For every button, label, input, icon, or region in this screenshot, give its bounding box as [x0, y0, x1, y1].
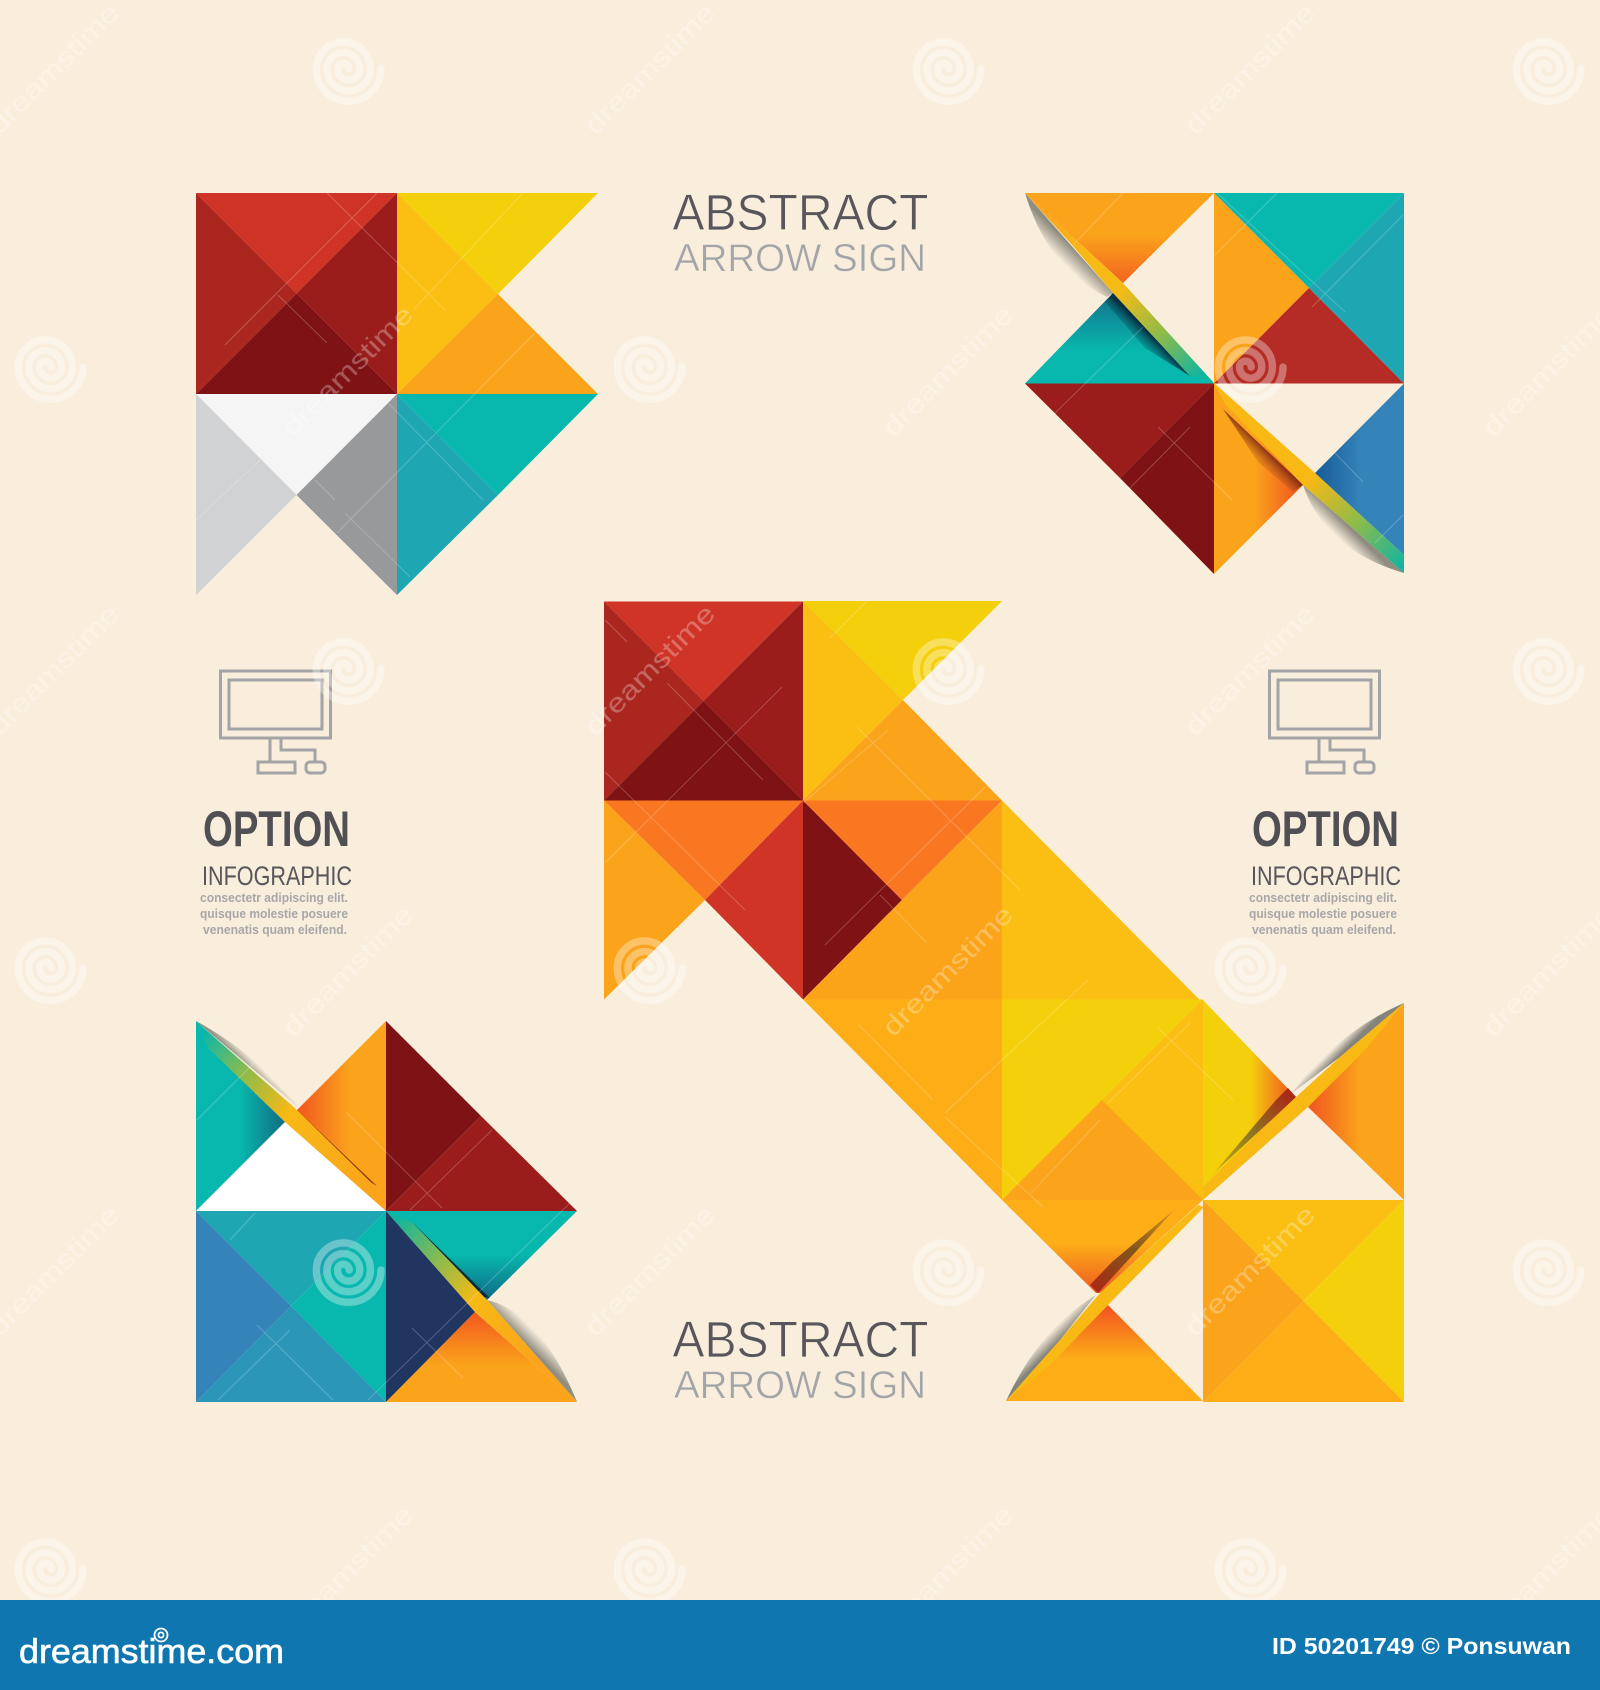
- panel: bottom-left folded arrow: [196, 1021, 577, 1402]
- text: body: consectetr adipiscing elit.: [200, 891, 348, 905]
- heading: top title: ABSTRACT: [672, 184, 928, 241]
- upper fold: [1203, 1003, 1404, 1200]
- text: option: OPTION: [1252, 801, 1399, 857]
- text: body: venenatis quam eleifend.: [203, 923, 347, 937]
- watermark text: dreamstime: [276, 299, 419, 442]
- watermark text: dreamstime: [876, 299, 1019, 442]
- watermark text: dreamstime: [1476, 899, 1600, 1042]
- heading: bottom title: ABSTRACT: [672, 1311, 928, 1368]
- arrow head orange wing: [604, 800, 1002, 1000]
- watermark text: dreamstime: [1178, 0, 1321, 140]
- arrow head yellow wing: [803, 601, 1002, 800]
- watermark text: dreamstime: [876, 1499, 1019, 1642]
- grey arrow wing: [196, 394, 397, 595]
- panel: left option: [200, 671, 352, 937]
- heading: top title: [672, 184, 928, 280]
- heading: bottom title: ARROW SIGN: [674, 1364, 926, 1407]
- lower fold: [386, 1211, 577, 1402]
- right upper blocks: [1214, 193, 1404, 384]
- dark red triangle: [1025, 384, 1214, 574]
- text: body: consectetr adipiscing elit.: [1249, 891, 1397, 905]
- text: option: OPTION: [203, 801, 350, 857]
- red square: [196, 193, 397, 394]
- watermark text: dreamstime: [578, 598, 721, 741]
- text: body: quisque molestie posuere: [200, 907, 348, 921]
- watermark text: dreamstime: [1178, 1199, 1321, 1342]
- footer bar: [0, 1600, 1600, 1690]
- dark red triangle: [386, 1021, 577, 1211]
- panel: right option: [1249, 671, 1401, 937]
- watermark text: dreamstime: [276, 1499, 419, 1642]
- footer logo: dreamstime.com: [19, 1633, 284, 1671]
- watermark text: dreamstime: [1476, 299, 1600, 442]
- icon: logo spiral: [154, 1628, 168, 1642]
- text: body: [200, 891, 348, 937]
- icon: monitor: [1270, 671, 1380, 773]
- footer credit: ID 50201749 © Ponsuwan: [1272, 1633, 1571, 1659]
- watermark text: dreamstime: [276, 899, 419, 1042]
- watermark text: dreamstime: [578, 1199, 721, 1342]
- watermark text: dreamstime: [1476, 1499, 1600, 1642]
- text: infographic: INFOGRAPHIC: [202, 861, 352, 891]
- watermark text: dreamstime: [1178, 598, 1321, 741]
- panel: top-right folded arrow: [1025, 193, 1404, 574]
- arrow shaft: [803, 800, 1296, 1293]
- text: body: quisque molestie posuere: [1249, 907, 1397, 921]
- upper fold: [196, 1021, 386, 1211]
- lower fold: [1006, 1205, 1204, 1401]
- panel: large central arrow: [604, 601, 1404, 1402]
- yellow arrow wing: [397, 193, 598, 394]
- watermark text: dreamstime: [578, 0, 721, 140]
- text: infographic: INFOGRAPHIC: [1251, 861, 1401, 891]
- lower square: [196, 1211, 475, 1402]
- heading: top title: ARROW SIGN: [674, 237, 926, 280]
- lower fold: [1214, 383, 1404, 574]
- top fold: [1025, 193, 1214, 384]
- icon: monitor: [220, 671, 330, 773]
- watermark text: dreamstime: [876, 899, 1019, 1042]
- panel: top-left square arrow: [196, 193, 598, 595]
- text: body: [1249, 891, 1397, 937]
- text: body: venenatis quam eleifend.: [1252, 923, 1396, 937]
- teal triangle: [397, 394, 598, 595]
- bottom-right square: [1203, 1200, 1404, 1402]
- arrow head red square: [604, 602, 803, 800]
- heading: bottom title: [672, 1311, 928, 1407]
